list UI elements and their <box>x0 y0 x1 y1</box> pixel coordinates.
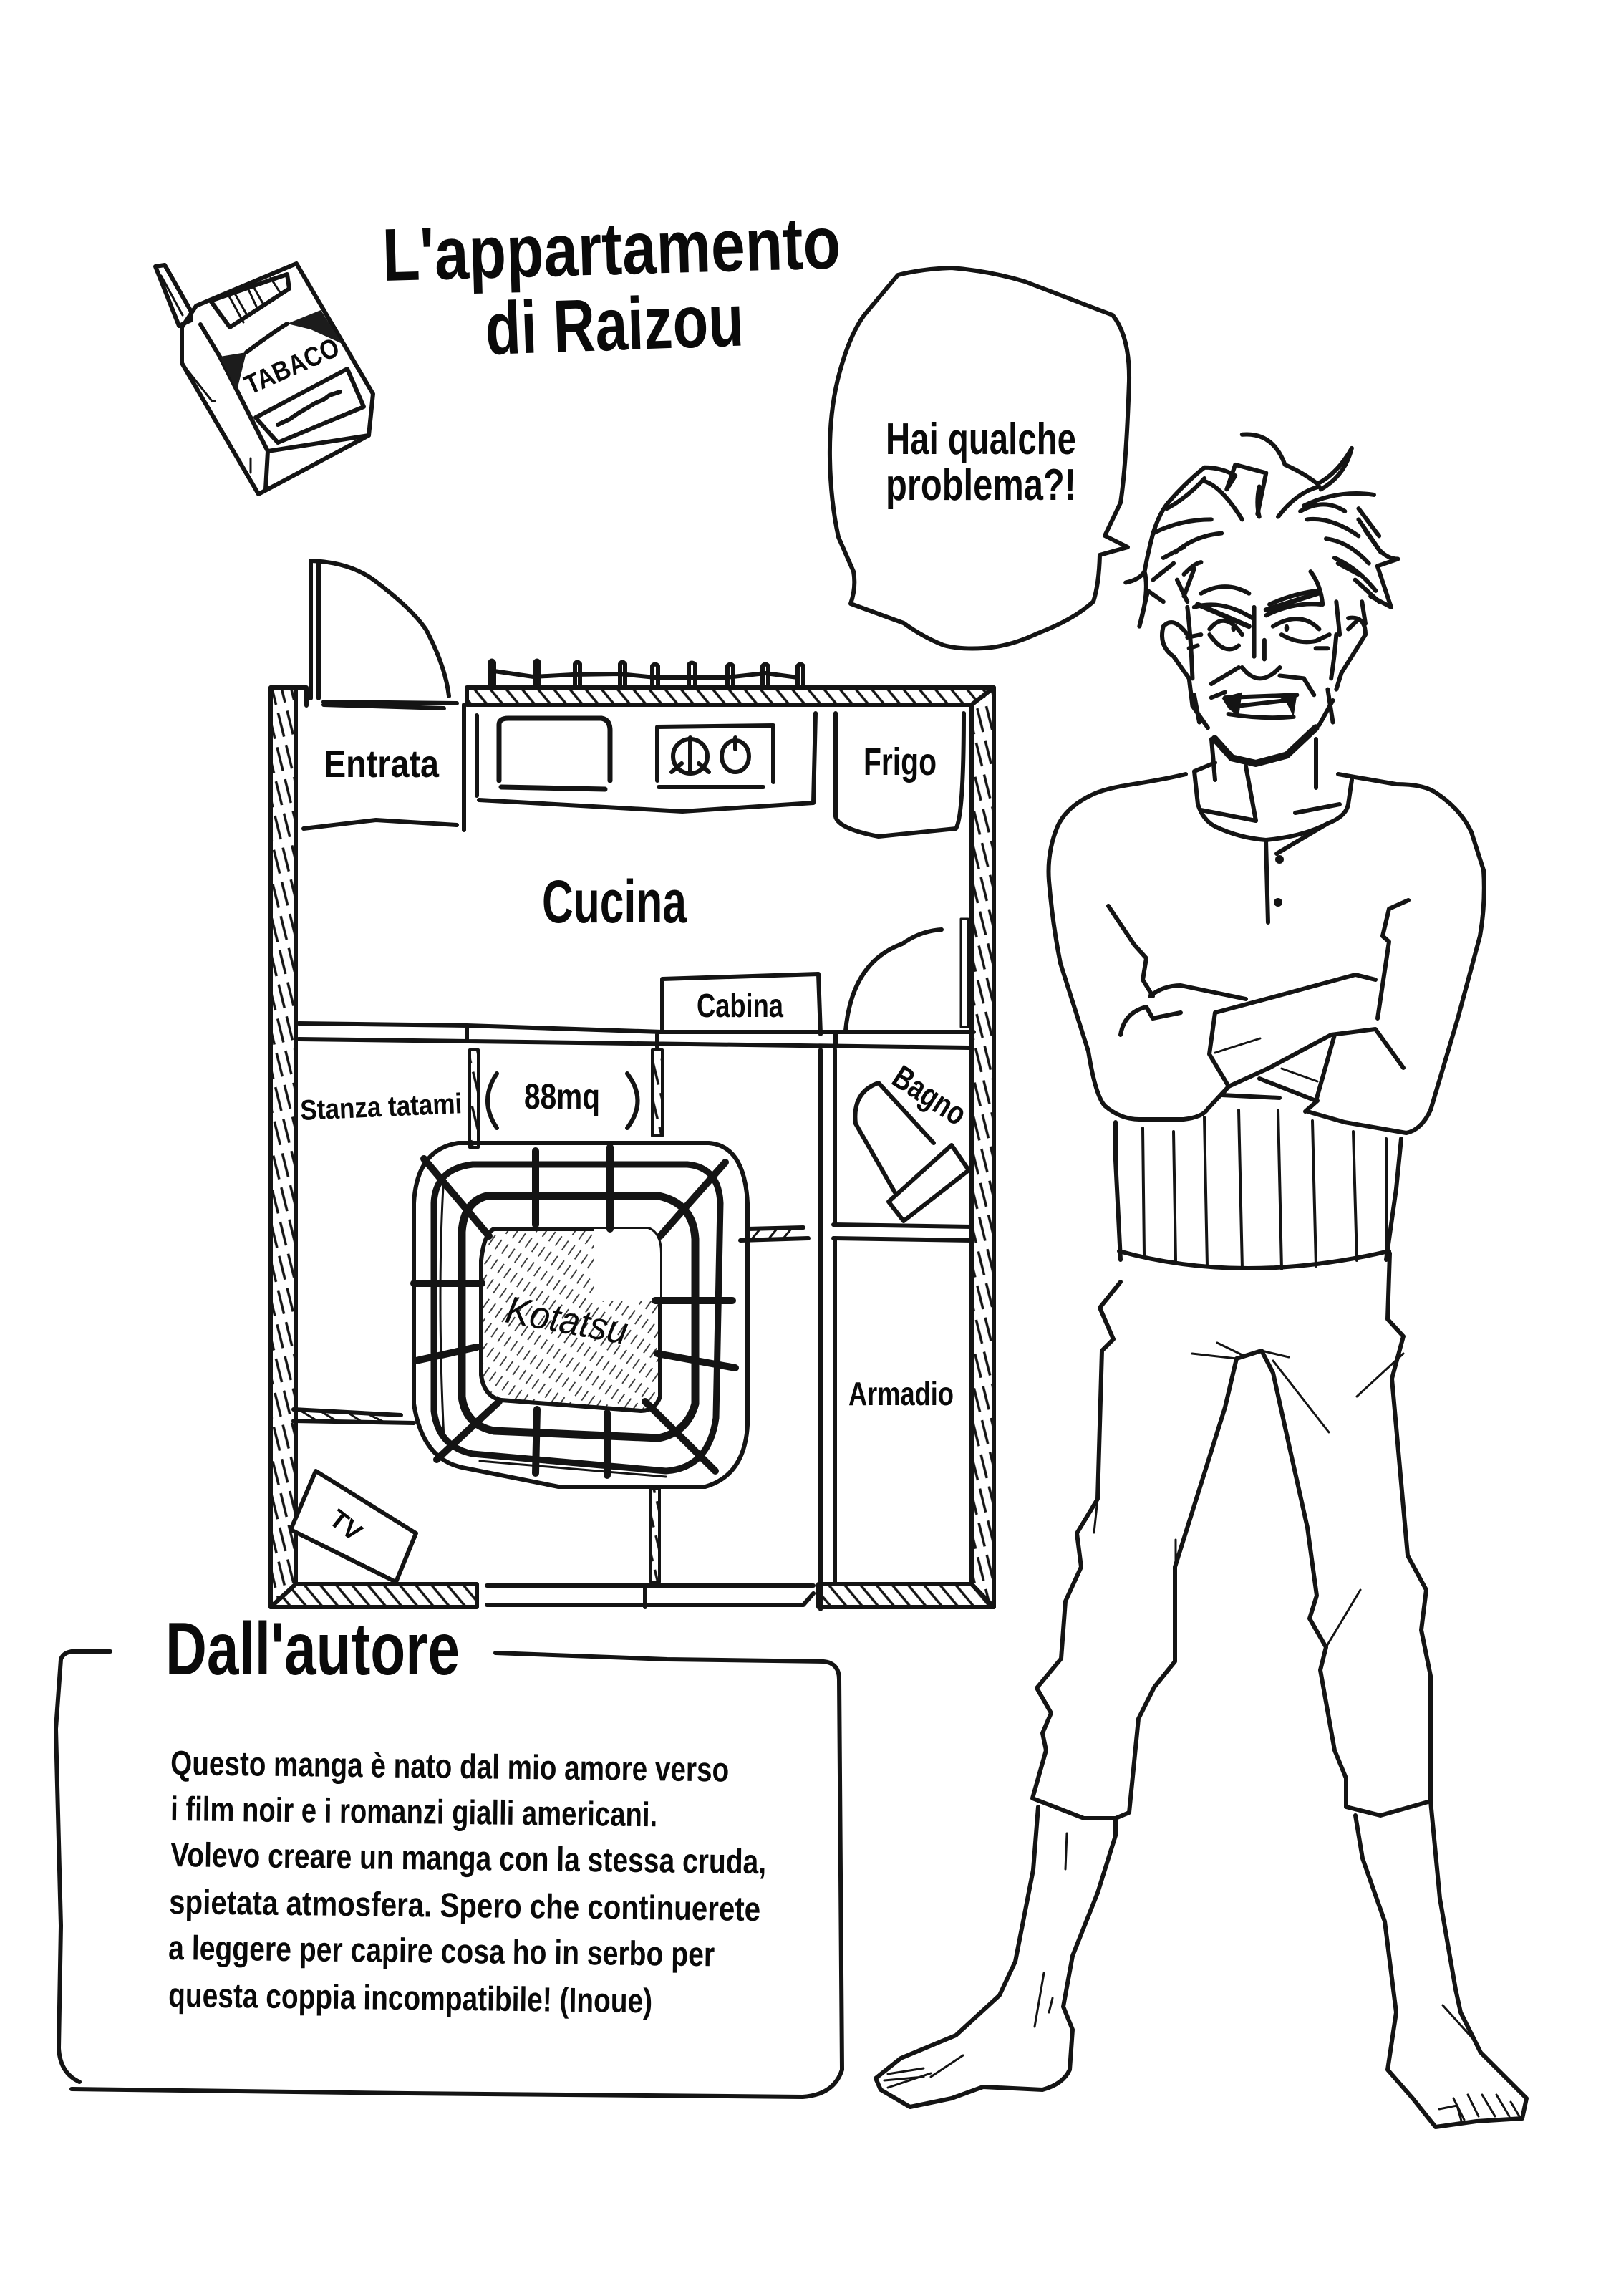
tv: TV <box>324 1503 368 1547</box>
cabin: Cabina <box>697 987 783 1024</box>
label: bathroom: Bagno <box>886 1058 974 1132</box>
crossed arms <box>1108 900 1408 1111</box>
kotatsu <box>414 1143 748 1487</box>
entrance room <box>304 705 464 830</box>
neck <box>1211 739 1316 821</box>
toilet <box>855 1083 969 1221</box>
partition wall <box>299 1023 974 1048</box>
kotatsu label: Kotatsu <box>503 1288 632 1353</box>
fridge: Frigo <box>863 741 937 783</box>
note frame <box>56 1651 842 2097</box>
collar <box>1194 763 1352 840</box>
speech bubble <box>830 268 1129 649</box>
label: kitchen: Cucina <box>542 868 687 935</box>
note body: spietata atmosfera. Spero che continuerete <box>169 1883 760 1929</box>
label: wardrobe: Armadio <box>848 1375 954 1412</box>
pack label text: TABACO <box>241 332 344 401</box>
speech bubble: problema?! <box>886 460 1076 510</box>
kitchen counter <box>477 713 816 811</box>
entrance room: Entrata <box>324 743 440 786</box>
title: di Raizou <box>484 279 745 371</box>
panel: author note <box>56 1608 842 2097</box>
bathroom door <box>846 919 968 1031</box>
fridge <box>836 713 964 836</box>
pillars <box>470 1050 662 1582</box>
title: L'appartamento <box>381 201 841 297</box>
note body: questa coppia incompatibile! (Inoue) <box>168 1977 652 2020</box>
head <box>1126 434 1398 763</box>
trousers <box>1032 1253 1431 1818</box>
floor plan <box>271 561 994 1609</box>
outer walls <box>271 688 994 1607</box>
icon: cigarette pack <box>155 264 373 494</box>
note body: Questo manga è nato dal mio amore verso <box>170 1745 729 1790</box>
character: Raizou <box>876 434 1527 2127</box>
label: area: 88mq <box>524 1076 600 1116</box>
hair <box>1126 434 1398 627</box>
label: tatami room: Stanza tatami <box>299 1088 463 1127</box>
bathroom divider <box>833 1225 972 1240</box>
tatami seams <box>294 1227 808 1423</box>
title <box>381 201 841 371</box>
right leg and foot <box>1355 1801 1527 2127</box>
speech bubble text: Hai qualche <box>886 415 1076 464</box>
note body: Volevo creare un manga con la stessa cruda, <box>170 1836 766 1881</box>
note body: i film noir e i romanzi gialli americani. <box>170 1790 657 1834</box>
left leg and foot <box>876 1807 1116 2107</box>
beard and mouth <box>1192 667 1333 763</box>
placket and buttons <box>1266 824 1327 922</box>
balcony railing <box>490 660 803 686</box>
label: area <box>488 1074 637 1128</box>
cabin <box>662 974 821 1034</box>
face <box>1187 587 1336 678</box>
note body: a leggere per capire cosa ho in serbo per <box>168 1929 715 1974</box>
sweater <box>1048 763 1484 1269</box>
sink <box>499 718 610 789</box>
ribbing <box>1116 1110 1401 1269</box>
stove <box>657 725 773 787</box>
entrance door <box>311 561 457 708</box>
closet wall <box>821 1050 835 1609</box>
note body <box>168 1745 766 2020</box>
ears <box>1162 602 1365 706</box>
tv <box>291 1471 416 1582</box>
note heading: Dall'autore <box>165 1608 460 1691</box>
kotatsu table <box>481 1229 660 1411</box>
